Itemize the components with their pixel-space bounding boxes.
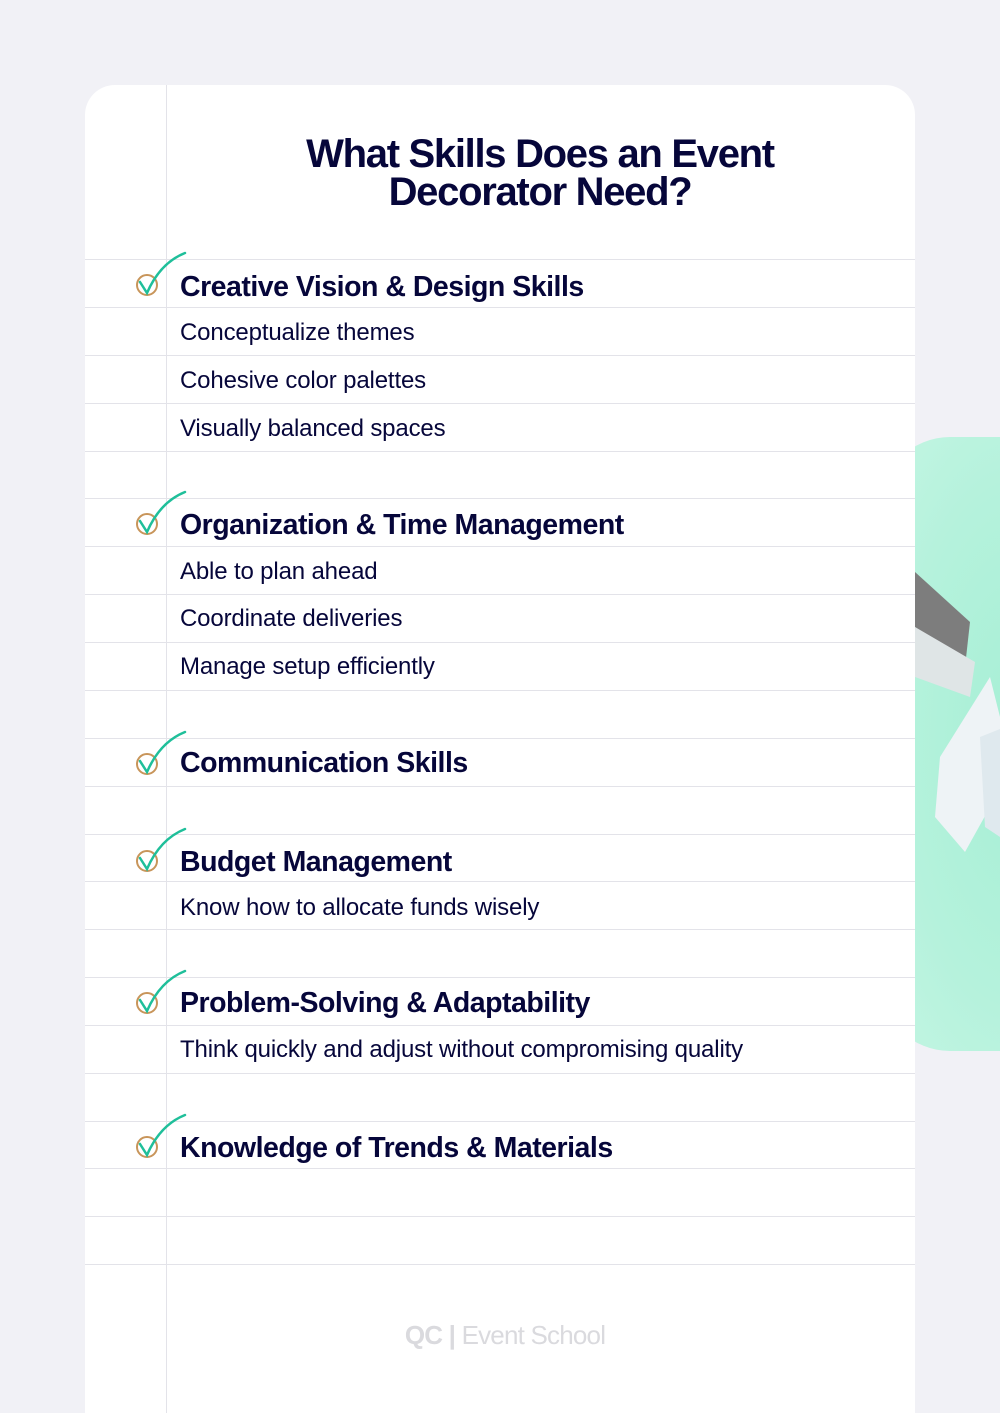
heading: communication: Communication Skills <box>180 747 468 779</box>
title: Decorator Need? <box>389 170 691 214</box>
footer logo: QC | Event School <box>405 1320 605 1350</box>
text: organization items: Manage setup efficiently <box>180 653 435 680</box>
heading: problem solving: Problem-Solving & Adaptability <box>180 987 590 1019</box>
icon: check 6 <box>136 1114 186 1158</box>
icon: check 2 <box>136 490 186 535</box>
icon: check 4 <box>136 828 186 872</box>
text: organization items: Able to plan ahead <box>180 558 377 585</box>
heading: organization: Organization & Time Management <box>180 509 624 541</box>
icon: check 1 <box>136 252 186 296</box>
text: organization items <box>180 558 435 680</box>
text: creative items: Cohesive color palettes <box>180 367 426 394</box>
vertical margin line <box>166 85 167 1413</box>
icon: check 5 <box>136 970 186 1014</box>
text: organization items: Coordinate deliveries <box>180 605 402 632</box>
decorative plate with bow <box>880 437 1000 1051</box>
text: creative items: Conceptualize themes <box>180 319 414 346</box>
icon: check 3 <box>136 730 186 775</box>
heading: budget: Budget Management <box>180 846 452 878</box>
text: budget item: Know how to allocate funds wisely <box>180 894 539 921</box>
text: creative items <box>180 319 445 442</box>
card <box>85 85 915 1413</box>
title: What Skills Does an Event <box>306 132 774 176</box>
text: creative items: Visually balanced spaces <box>180 415 445 442</box>
text: problem item: Think quickly and adjust without compromising quality <box>180 1036 743 1063</box>
title <box>306 132 775 214</box>
heading: knowledge: Knowledge of Trends & Materials <box>180 1132 613 1164</box>
heading: creative vision: Creative Vision & Design Skills <box>180 271 584 303</box>
